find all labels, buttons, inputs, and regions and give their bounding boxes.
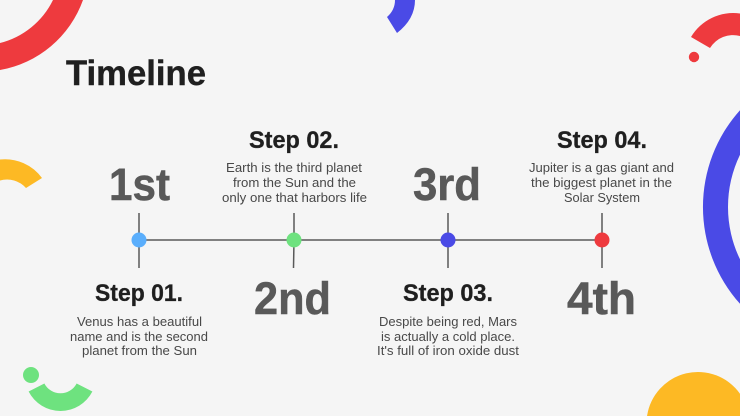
block: step 02 [222,127,367,205]
label: 4th: 4th [567,273,636,324]
description: step 01 [70,314,208,358]
description: step 02: Earth is the third planet [226,160,362,175]
decoration: green arc and dot bottom left [23,367,84,402]
description: step 03: is actually a cold place. [381,329,515,344]
description: step 04 [529,160,674,205]
decoration: blue ring right [703,110,740,304]
heading: step 02: Step 02. [249,127,339,154]
decoration: yellow arc left [0,159,42,188]
timeline axis [139,213,602,268]
title: Timeline [66,54,206,93]
heading: step 04: Step 04. [557,127,647,154]
heading: step 03: Step 03. [403,280,493,307]
description: step 02: from the Sun and the [233,175,356,190]
block: step 01 [70,280,208,358]
label: 1st: 1st [109,159,170,210]
heading: step 01: Step 01. [95,280,183,307]
decoration: red arc top left [0,0,83,70]
description: step 02: only one that harbors life [222,190,367,205]
description: step 03: Despite being red, Mars [379,314,517,329]
description: step 03 [377,314,519,358]
description: step 01: planet from the Sun [82,343,197,358]
label: 2nd: 2nd [254,273,331,324]
description: step 04: Jupiter is a gas giant and [529,160,674,175]
block: step 03 [377,280,519,358]
description: step 01: name and is the second [70,329,208,344]
description: step 04: Solar System [564,190,640,205]
description: step 03: It's full of iron oxide dust [377,343,519,358]
marker: step 3 [440,232,456,248]
block: step 04 [529,127,674,205]
description: step 04: the biggest planet in the [531,175,672,190]
description: step 02 [222,160,367,205]
marker: step 2 [286,232,302,248]
label: 3rd: 3rd [413,159,481,210]
description: step 01: Venus has a beautiful [77,314,202,329]
decoration: yellow circle bottom right [647,372,740,416]
marker: step 1 [132,232,146,248]
decoration: blue arc top centre [387,0,415,33]
marker: step 4 [594,232,610,248]
decoration: red arc and dot top right [689,13,740,62]
